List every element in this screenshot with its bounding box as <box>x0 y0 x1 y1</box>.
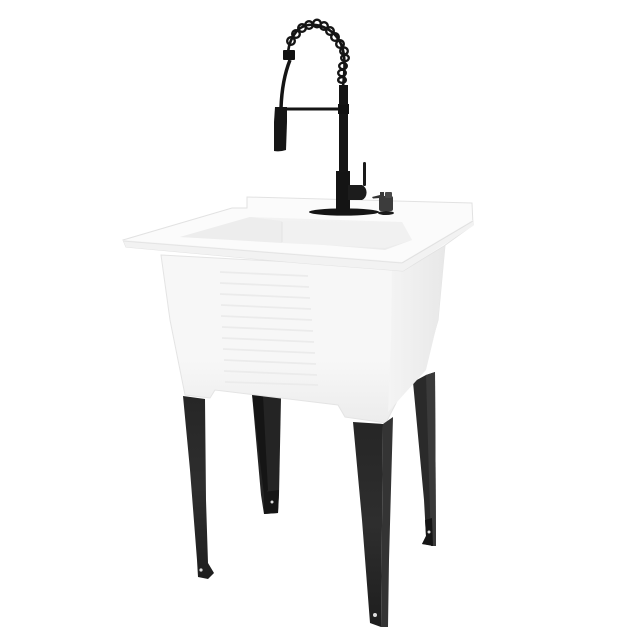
soap dispenser <box>372 192 394 215</box>
washboard ribs <box>220 272 318 385</box>
base plate <box>309 208 379 216</box>
sink rim <box>123 197 473 271</box>
leg: front left <box>183 396 214 579</box>
handle hub <box>348 185 367 200</box>
coil spring <box>287 20 349 86</box>
faucet body <box>336 171 350 212</box>
ribbed sleeve <box>339 85 348 105</box>
basin body <box>161 245 445 423</box>
leg: front right <box>353 417 393 627</box>
collar <box>338 104 349 114</box>
front legs <box>183 396 393 627</box>
leg: back middle <box>252 394 281 514</box>
hose collar <box>283 50 295 60</box>
basin interior <box>180 217 412 250</box>
sprayer head <box>274 107 287 151</box>
hose <box>281 60 290 108</box>
right side panel <box>388 245 445 412</box>
stem <box>339 112 348 172</box>
lever <box>363 162 366 186</box>
faucet <box>274 20 379 216</box>
cross arm <box>286 108 339 110</box>
back legs <box>252 372 436 546</box>
leg: back right <box>413 372 436 546</box>
